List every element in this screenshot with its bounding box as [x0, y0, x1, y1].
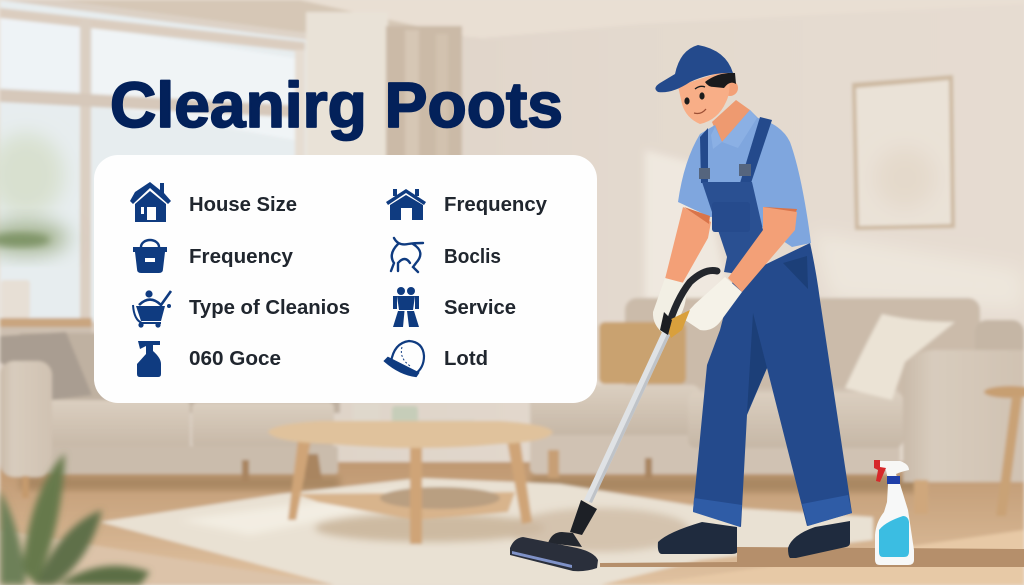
coffee table — [268, 403, 553, 544]
picture frame — [852, 75, 955, 230]
red nozzle — [874, 460, 886, 482]
ear — [722, 80, 738, 96]
icon: bucket — [133, 240, 167, 273]
shirt — [678, 110, 811, 247]
bottle body — [875, 484, 914, 565]
nozzle head — [510, 537, 598, 571]
trousers — [693, 243, 852, 527]
icon: house with chimneys — [386, 189, 426, 220]
shelf — [0, 318, 92, 327]
panel: factors list — [94, 155, 597, 403]
side table — [984, 386, 1024, 516]
right shoe — [788, 521, 850, 558]
neck — [712, 100, 750, 146]
face details — [684, 86, 706, 114]
right glove — [682, 277, 742, 330]
icon: loop symbol — [391, 238, 423, 272]
left arm — [665, 207, 711, 284]
ceiling — [60, 0, 480, 38]
vacuum cleaner — [510, 310, 690, 571]
trigger head — [878, 461, 909, 480]
label: service: Service — [444, 296, 516, 319]
cap — [655, 45, 733, 92]
nozzle stripe — [512, 551, 572, 568]
overall straps — [700, 128, 708, 183]
wall light patches — [645, 150, 730, 300]
window — [0, 0, 308, 330]
icon: cleaning cart — [133, 290, 171, 328]
floor — [0, 462, 1024, 585]
label: frequency: Frequency — [444, 193, 548, 216]
inner leg shade — [747, 313, 767, 413]
foreground blurred plant — [0, 453, 150, 585]
sleeve shadow — [684, 207, 710, 224]
floor shadow — [600, 547, 1024, 567]
yellow clip and grip — [665, 310, 690, 338]
head — [678, 70, 730, 124]
icon: dome scraper — [385, 341, 424, 376]
plant and vase in the window — [0, 133, 64, 217]
title: Cleanirg Poots — [110, 69, 563, 141]
left sofa — [0, 332, 340, 498]
bib pocket — [712, 202, 750, 232]
rug — [100, 478, 873, 585]
nozzle body — [548, 532, 582, 547]
worker — [653, 45, 852, 558]
collar — [711, 110, 757, 149]
blue liquid — [879, 516, 909, 557]
icon: house — [130, 182, 171, 222]
label: boclis: Boclis — [444, 245, 501, 268]
curtains — [306, 12, 388, 332]
bib — [702, 182, 763, 275]
sofa floor shadows — [20, 476, 340, 490]
icon: service figures — [393, 287, 419, 327]
neck — [570, 500, 597, 535]
right sofa — [530, 298, 1024, 514]
spray bottle — [874, 460, 914, 565]
side pocket — [783, 256, 808, 289]
label: lotd: Lotd — [444, 347, 488, 370]
vacuum handle — [668, 270, 717, 328]
right arm — [728, 207, 797, 292]
blue collar — [887, 476, 900, 484]
left shoe — [658, 522, 737, 554]
label: 060 goce: 060 Goce — [189, 347, 281, 370]
icon: spray bottle — [137, 341, 161, 377]
label: house size: House Size — [189, 193, 297, 216]
pole — [584, 332, 670, 503]
label: type of cleaning: Type of Cleanios — [189, 296, 350, 319]
label: frequency: Frequency — [189, 245, 294, 268]
left glove — [653, 278, 686, 335]
cuffs — [693, 498, 742, 527]
hair — [705, 73, 736, 88]
